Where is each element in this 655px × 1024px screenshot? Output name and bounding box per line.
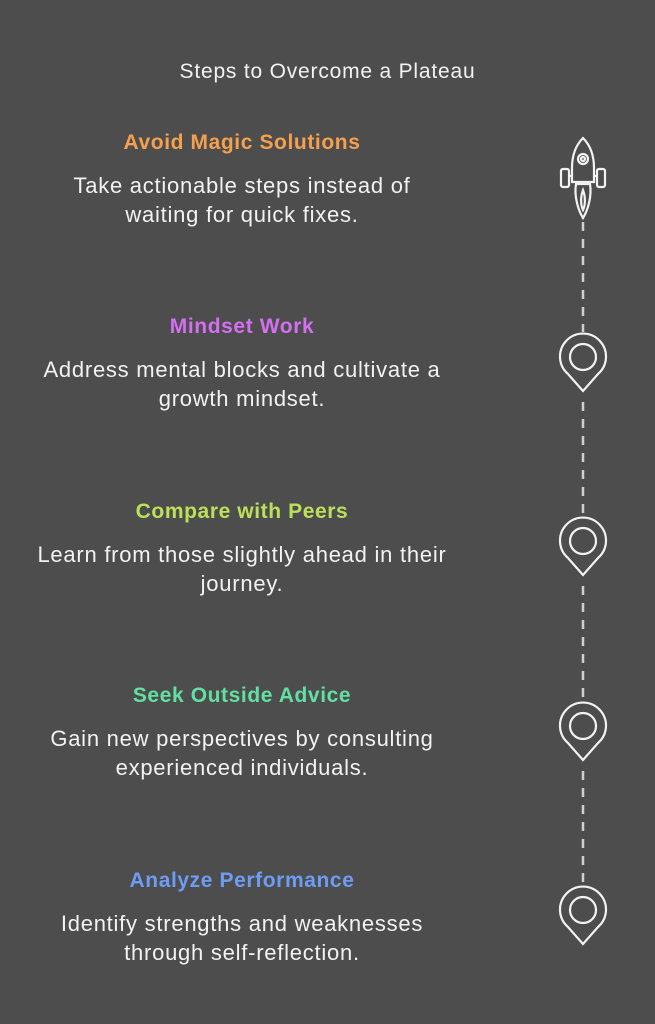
dashed line: [582, 222, 584, 885]
step: compare with peers: [37, 500, 447, 596]
icon: pin 1: [560, 334, 606, 391]
step: seek outside advice: [50, 684, 434, 780]
step: avoid magic solutions: Take actionable steps instead of: [73, 173, 411, 198]
step: seek outside advice: Seek Outside Advice: [133, 684, 351, 707]
step: compare with peers: Learn from those slightly ahead in their: [37, 542, 447, 567]
step: mindset work: growth mindset.: [159, 386, 325, 411]
icon: pin 2: [560, 518, 606, 575]
step: analyze performance: Analyze Performance: [130, 869, 354, 892]
step: seek outside advice: experienced individuals.: [116, 755, 368, 780]
step: mindset work: Address mental blocks and cultivate a: [43, 357, 441, 382]
step: seek outside advice: Gain new perspectives by consulting: [50, 726, 434, 751]
step: analyze performance: [61, 869, 423, 965]
step: avoid magic solutions: waiting for quick fixes.: [125, 202, 359, 227]
icon: pin 3: [560, 703, 606, 760]
step: analyze performance: Identify strengths and weaknesses: [61, 911, 423, 936]
icon: rocket: [561, 138, 605, 218]
step: compare with peers: Compare with Peers: [136, 500, 348, 523]
step: mindset work: [43, 315, 441, 411]
step: compare with peers: journey.: [201, 571, 283, 596]
step: avoid magic solutions: [73, 131, 411, 227]
icon: pin 4: [560, 887, 606, 944]
step: avoid magic solutions: Avoid Magic Solutions: [124, 131, 360, 154]
title: Steps to Overcome a Plateau: [180, 60, 475, 83]
step: analyze performance: through self-reflection.: [124, 940, 360, 965]
step: mindset work: Mindset Work: [170, 315, 314, 338]
